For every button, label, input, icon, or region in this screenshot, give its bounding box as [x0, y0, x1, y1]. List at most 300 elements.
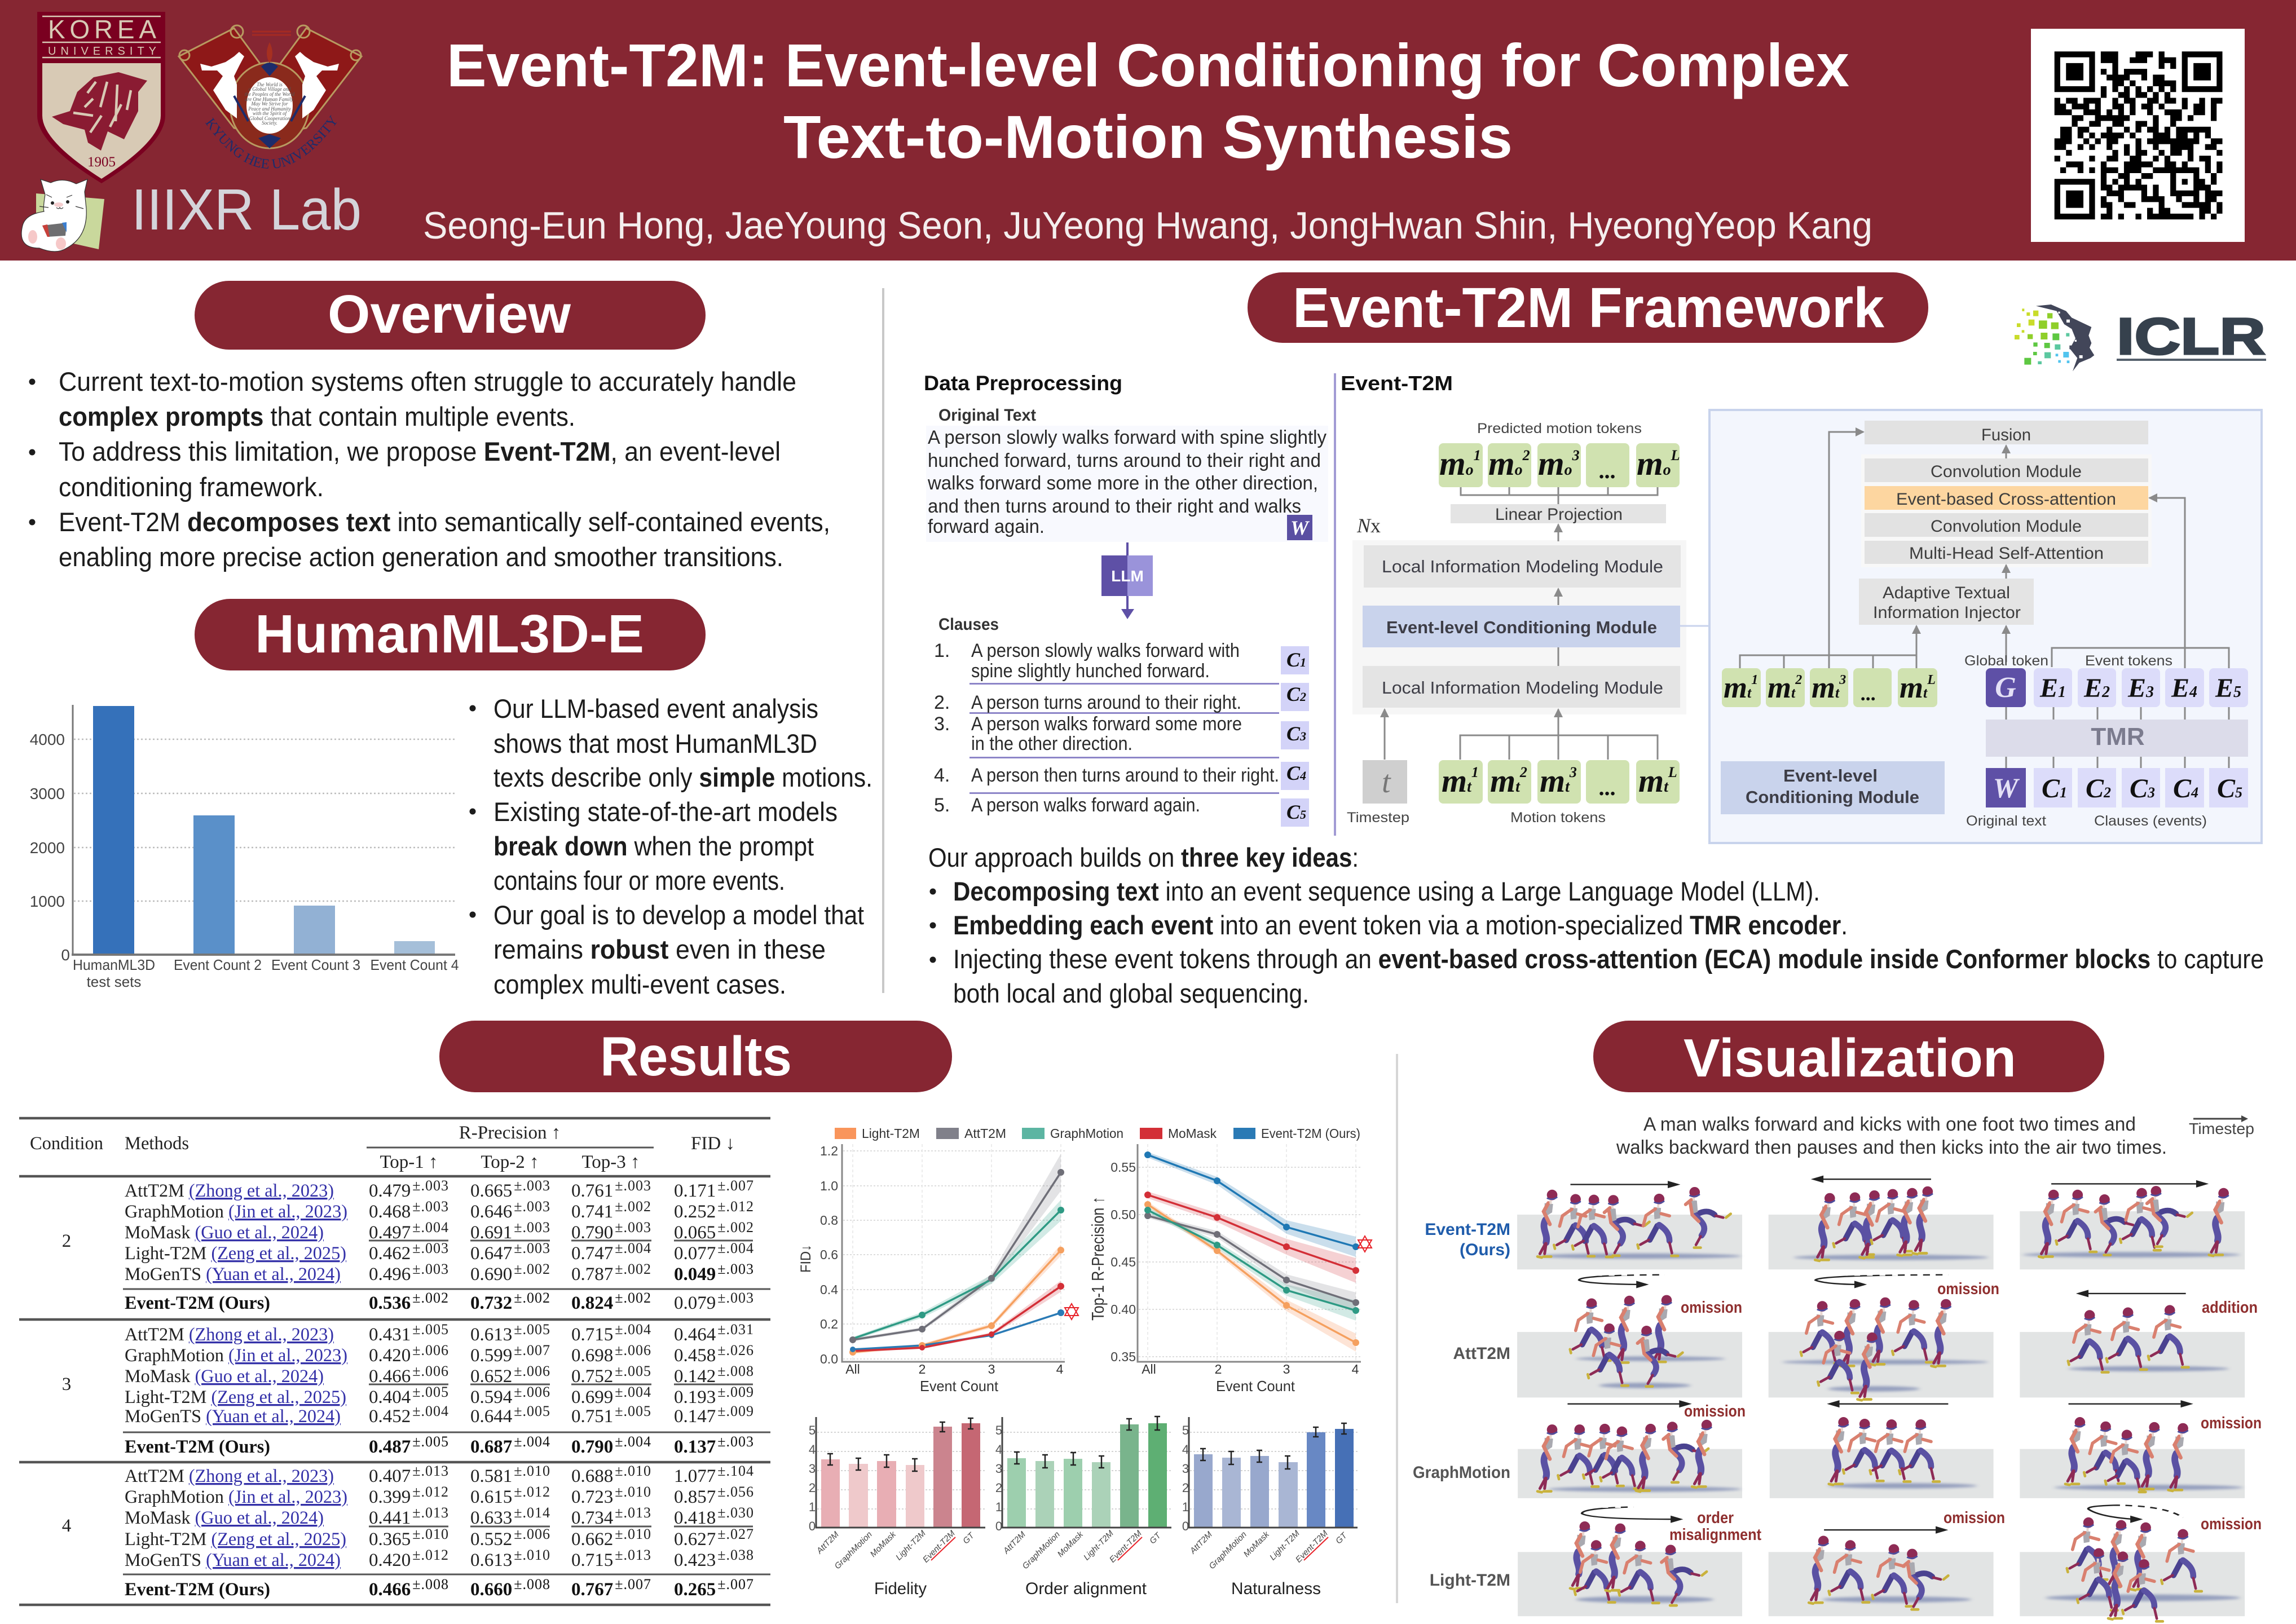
- predicted motion token row: 3: [1572, 447, 1580, 464]
- bar chart: event count distribution: [30, 705, 459, 990]
- table rows: condition 4: 0.581: [470, 1466, 512, 1486]
- table rows: condition 3: ±.005: [412, 1321, 449, 1338]
- table rows: condition 4: 1.077: [674, 1466, 716, 1486]
- row 3 figures: [1537, 1417, 2188, 1492]
- table rows: condition 4: ±.030: [717, 1504, 754, 1521]
- table rows: condition 2: 0.741: [571, 1202, 613, 1222]
- label: Original Text: Original Text: [938, 406, 1036, 425]
- table rows: condition 2: ±.004: [412, 1219, 449, 1235]
- table rows: condition 2: 0.065: [674, 1223, 716, 1243]
- logo: Kyung Hee University emblem: Peace and Humanity: [248, 106, 291, 112]
- line chart: FID by event count: All: [845, 1362, 860, 1376]
- table rows: condition 4: ±.007: [615, 1576, 651, 1592]
- text block: overview bullets: Event-T2M decomposes text into semantically self-contained events,: [59, 507, 830, 537]
- block: Event-level Conditioning Module legend: Conditioning Module: [1746, 787, 1919, 807]
- table rows: condition 3: 0.613: [470, 1325, 512, 1345]
- table rows: condition 2: 0.690: [470, 1264, 512, 1285]
- bar chart: Naturalness: GraphMotion: [1207, 1530, 1249, 1571]
- bar chart: Naturalness: Event-T2M: [1294, 1528, 1330, 1565]
- table rows: condition 2: MoMask (Guo et al., 2024): [125, 1223, 324, 1243]
- block: Adaptive Textual Information Injector: Adaptive Textual: [1883, 584, 2010, 602]
- line chart: Top-1 R-Precision by event count: 4: [1352, 1362, 1359, 1376]
- input: motion tokens: mt: [1638, 762, 1668, 799]
- bar chart: event count distribution: Event Count 4: [370, 956, 459, 973]
- table rows: condition 2: AttT2M (Zhong et al., 2023): [125, 1181, 334, 1201]
- panel: Data Preprocessing: [924, 372, 1328, 827]
- table rows: condition 4: 0.407: [369, 1466, 411, 1486]
- error annotations: omission: [1937, 1280, 1999, 1298]
- table rows: condition 2: 0.479: [369, 1181, 411, 1201]
- bar chart: Fidelity: Event-T2M: [921, 1528, 957, 1565]
- table rows: condition 3: 0.420: [369, 1345, 411, 1366]
- table rows: condition 3: 0.790: [571, 1437, 613, 1457]
- bar chart: event count distribution: 0: [61, 946, 70, 964]
- title: Event-T2M: Event-level Conditioning for Complex: [447, 31, 1849, 99]
- bar chart: Order alignment: 1: [995, 1500, 1002, 1514]
- table header: FID ↓: [691, 1133, 735, 1154]
- line chart: FID by event count: 0.6: [820, 1247, 838, 1262]
- line chart: FID by event count: FID↓: [798, 1245, 814, 1273]
- input: motion tokens: 1: [1471, 764, 1479, 780]
- row labels: (Ours): [1460, 1241, 1510, 1259]
- predicted motion token row: mo: [1439, 445, 1474, 482]
- text block: HumanML3D-E bullets: Existing state-of-the-art models: [493, 797, 838, 827]
- bar chart: event count distribution: 1000: [30, 893, 65, 910]
- table rows: condition 3: ±.005: [514, 1321, 550, 1338]
- table rows: condition 3: GraphMotion (Jin et al., 2023): [125, 1345, 347, 1366]
- bar chart: Fidelity: Fidelity: [874, 1579, 927, 1598]
- table rows: condition 2: ±.002: [615, 1290, 651, 1306]
- input: motion tokens: mt: [1442, 762, 1471, 799]
- table rows: condition 2: ±.003: [615, 1177, 651, 1194]
- block: TMR: TMR: [2091, 723, 2145, 751]
- table rows: condition 3: ±.004: [412, 1403, 449, 1419]
- predicted motion token row: L: [1671, 447, 1680, 464]
- list: clauses: C4: [1286, 762, 1306, 784]
- table rows: condition 2: ±.004: [717, 1240, 754, 1256]
- table rows: condition 2: 0.665: [470, 1181, 512, 1201]
- table rows: condition 2: MoGenTS (Yuan et al., 2024): [125, 1264, 341, 1285]
- table rows: condition 4: ±.014: [514, 1504, 550, 1521]
- table rows: condition 2: ±.012: [717, 1198, 754, 1215]
- bar chart: event count distribution: Event Count 3: [271, 956, 360, 973]
- table rows: condition 4: ±.007: [717, 1576, 754, 1592]
- predicted motion token row: ...: [1599, 458, 1616, 483]
- logo: Korea University crest: UNIVERSITY: [48, 45, 156, 58]
- predicted motion token row: 1: [1474, 447, 1481, 464]
- table rows: condition 2: ±.003: [717, 1261, 754, 1277]
- table rows: condition 2: 0.077: [674, 1243, 716, 1264]
- list: clauses: 1.: [934, 640, 950, 661]
- text block: HumanML3D-E bullets: Our goal is to develop a model that: [493, 900, 864, 930]
- line chart: FID by event count: 0.2: [820, 1317, 838, 1331]
- table rows: condition 4: MoGenTS (Yuan et al., 2024): [125, 1550, 341, 1570]
- logo: Kyung Hee University emblem: Global Cooperation: [249, 116, 290, 121]
- logo: Kyung Hee University emblem: [177, 25, 363, 169]
- clause token row: C5: [2217, 774, 2242, 804]
- timestep arrow: Timestep: [2189, 1120, 2254, 1137]
- logo text: IIIXR Lab: IIIXR Lab: [131, 177, 362, 242]
- text motion token row: mt: [1768, 670, 1795, 704]
- heading: Event-T2M: Event-T2M: [1341, 372, 1453, 395]
- line chart: Top-1 R-Precision by event count: 0.35: [1110, 1349, 1136, 1364]
- block: Fusion: Fusion: [1981, 426, 2031, 444]
- labels: original text and clauses: [1966, 813, 2207, 829]
- table rows: condition 2: Light-T2M (Zeng et al., 2025): [125, 1243, 346, 1264]
- table rows: condition 4: ±.010: [615, 1526, 651, 1542]
- bar chart: Fidelity: 1: [809, 1500, 816, 1514]
- table rows: condition 2: 0.536: [369, 1293, 411, 1313]
- table rows: condition 3: 0.458: [674, 1345, 716, 1366]
- logo: Kyung Hee University emblem: Society.: [262, 120, 277, 126]
- clause token row: W: [1993, 772, 2020, 804]
- global and event token row: E2: [2083, 673, 2110, 703]
- row labels: Light-T2M: [1430, 1571, 1510, 1590]
- table rows: condition 2: ±.002: [514, 1290, 550, 1306]
- bar chart: Fidelity: GT: [961, 1530, 977, 1546]
- table rows: condition 4: 0.723: [571, 1487, 613, 1507]
- table rows: condition 4: ±.013: [615, 1504, 651, 1521]
- label: predicted motion tokens: Predicted motion tokens: [1477, 421, 1642, 436]
- text block: overview bullets: conditioning framework.: [59, 472, 324, 502]
- bar chart: Naturalness: 3: [1182, 1462, 1189, 1476]
- table rows: condition 4: ±.012: [412, 1547, 449, 1563]
- block: Event-based Cross-attention: [1865, 486, 2148, 510]
- predicted motion token row: mo: [1488, 445, 1523, 482]
- input: motion tokens: mt: [1490, 762, 1520, 799]
- list: clauses: A person walks forward again.: [971, 795, 1200, 816]
- table rows: condition 4: AttT2M (Zhong et al., 2023): [125, 1466, 334, 1486]
- block: Event-level Conditioning Module legend: Event-level: [1783, 766, 1878, 785]
- table rows: condition 2: ±.003: [412, 1240, 449, 1256]
- table rows: condition 2: Event-T2M (Ours): [125, 1293, 270, 1313]
- row labels: AttT2M: [1453, 1344, 1510, 1363]
- logo: ICLR: [2015, 304, 2266, 371]
- block: Adaptive Textual Information Injector: Information Injector: [1873, 603, 2021, 622]
- bar chart: Fidelity: GraphMotion: [832, 1530, 874, 1571]
- bar chart: Fidelity: 3: [809, 1462, 816, 1476]
- table rows: condition 2: ±.007: [717, 1177, 754, 1194]
- row 4 figures: [1570, 1517, 2202, 1621]
- input: motion tokens: mt: [1540, 762, 1570, 799]
- text block: HumanML3D-E bullets: shows that most HumanML3D: [493, 729, 817, 758]
- logo: Kyung Hee University emblem: a Global Village and: [248, 86, 291, 92]
- table rows: condition 3: ±.009: [717, 1384, 754, 1400]
- text box: original text: W: [1290, 517, 1310, 539]
- bar chart: Naturalness: 1: [1182, 1500, 1189, 1514]
- text block: HumanML3D-E bullets: texts describe only simple motions.: [493, 762, 872, 792]
- list: clauses: 4.: [934, 765, 950, 786]
- bar chart: Naturalness: GT: [1334, 1530, 1350, 1546]
- block: Multi-Head Self-Attention: [1865, 541, 2148, 564]
- block: linear projection: [1451, 504, 1666, 524]
- bar chart: event count distribution: test sets: [87, 973, 141, 990]
- table rows: condition 2: 0.252: [674, 1202, 716, 1222]
- heading: HumanML3D-E: HumanML3D-E: [255, 604, 644, 664]
- block: Multi-Head Self-Attention: Multi-Head Self-Attention: [1909, 544, 2104, 563]
- line chart: Top-1 R-Precision by event count: Top-1 R-Precision ↑: [1088, 1197, 1108, 1321]
- prompt caption: A man walks forward and kicks with one foot two times and: [1643, 1114, 2136, 1135]
- text block: overview bullets: Current text-to-motion systems often struggle to accurately handle: [59, 367, 796, 396]
- table rows: condition 4: 0.423: [674, 1550, 716, 1570]
- line chart: Top-1 R-Precision by event count: [1088, 1144, 1372, 1394]
- heading: Visualization: Visualization: [1684, 1028, 2016, 1088]
- table rows: condition 4: 0.265: [674, 1579, 716, 1600]
- line chart: Top-1 R-Precision by event count: All: [1142, 1362, 1156, 1376]
- bar chart: Naturalness: Light-T2M: [1268, 1528, 1302, 1563]
- logo: Kyung Hee University emblem: The World is: [257, 82, 283, 87]
- table rows: condition 4: ±.013: [615, 1547, 651, 1563]
- table rows: condition 3: Light-T2M (Zeng et al., 2025): [125, 1387, 346, 1407]
- table rows: condition 4: ±.056: [717, 1484, 754, 1500]
- input: timestep: [1347, 760, 1409, 826]
- table rows: condition 4: 0.552: [470, 1529, 512, 1550]
- table rows: condition 3: 0.404: [369, 1387, 411, 1407]
- arrows: stack flow: [1385, 524, 1658, 760]
- list: clauses: C2: [1286, 683, 1306, 705]
- bar chart: Order alignment: [995, 1416, 1171, 1598]
- table rows: condition 2: 0.171: [674, 1181, 716, 1201]
- table rows: condition 4: 0.662: [571, 1529, 613, 1550]
- line chart: FID by event count: 1.2: [820, 1144, 838, 1158]
- error annotations: omission: [1684, 1402, 1746, 1420]
- table rows: condition 4: 0.613: [470, 1550, 512, 1570]
- text box: original text: hunched forward, turns around to their right and: [928, 450, 1321, 471]
- error annotations: omission: [1944, 1509, 2005, 1527]
- bar chart: Order alignment: Light-T2M: [1082, 1528, 1116, 1563]
- logo: Korea University crest: KOREA: [48, 15, 156, 44]
- table rows: condition 2: 0.079: [674, 1293, 716, 1313]
- list: clauses: C3: [1286, 722, 1306, 745]
- line chart: Top-1 R-Precision by event count: 0.50: [1110, 1207, 1136, 1222]
- label: N x: Nx: [1356, 514, 1381, 537]
- text box: original text: walks forward some more in the other direction,: [927, 473, 1318, 494]
- line chart: Top-1 R-Precision by event count: Event Count: [1216, 1378, 1295, 1394]
- prompt caption: walks backward then pauses and then kicks into the air two times.: [1616, 1137, 2167, 1158]
- row 1 figures: [1537, 1186, 2229, 1261]
- table rows: condition 2: 0.497: [369, 1223, 411, 1243]
- error annotations: omission: [1681, 1299, 1742, 1317]
- authors: Seong-Eun Hong, JaeYoung Seon, JuYeong Hwang, JongHwan Shin, HyeongYeop Kang: [423, 204, 1872, 247]
- table rows: condition 3: 0.687: [470, 1437, 512, 1457]
- table rows: condition 3: ±.004: [615, 1384, 651, 1400]
- bar chart: Fidelity: Light-T2M: [894, 1528, 928, 1563]
- table rows: condition 4: ±.010: [615, 1484, 651, 1500]
- bar chart: Naturalness: MoMask: [1242, 1529, 1272, 1559]
- table header: [30, 1123, 735, 1172]
- table rows: condition 4: ±.013: [412, 1463, 449, 1479]
- table rows: condition 3: 3: [62, 1374, 71, 1394]
- table rows: condition 3: 0.699: [571, 1387, 613, 1407]
- line chart: Top-1 R-Precision by event count: 2: [1215, 1362, 1222, 1376]
- row 2 figures: [1570, 1295, 2188, 1400]
- text motion token row: mt: [1900, 670, 1927, 704]
- floors: [1517, 1211, 2245, 1616]
- block: Adaptive Textual Information Injector: [1859, 579, 2034, 625]
- bar chart: Order alignment: 5: [995, 1423, 1002, 1437]
- clause token row: C3: [2130, 774, 2155, 804]
- table header: Top-3 ↑: [581, 1152, 640, 1172]
- text block: overview bullets: complex prompts that contain multiple events.: [59, 401, 575, 431]
- table rows: condition 3: 0.751: [571, 1406, 613, 1427]
- table rows: condition 2: ±.004: [615, 1240, 651, 1256]
- line chart: FID by event count: 1.0: [820, 1179, 838, 1193]
- connector: to detail panel: [1680, 625, 1709, 627]
- table rows: condition 2: ±.003: [412, 1198, 449, 1215]
- table rows: condition 3: ±.006: [412, 1363, 449, 1379]
- QR code: [2031, 29, 2245, 242]
- bar chart: Fidelity: MoMask: [869, 1529, 898, 1559]
- table rows: condition 3: 0.466: [369, 1366, 411, 1387]
- row labels: [1413, 1220, 1510, 1590]
- bar chart: Order alignment: MoMask: [1056, 1529, 1086, 1559]
- text block: HumanML3D-E bullets: Our LLM-based event analysis: [493, 694, 818, 723]
- table rows: condition 3: 0.487: [369, 1437, 411, 1457]
- table rows: condition 2: ±.003: [514, 1198, 550, 1215]
- list: clauses: A person slowly walks forward with: [971, 640, 1240, 661]
- table rows: condition 2: ±.002: [717, 1219, 754, 1235]
- block: TMR: [1986, 720, 2248, 757]
- global and event token row: G: [1995, 672, 2016, 704]
- bar chart: Order alignment: 4: [995, 1442, 1002, 1457]
- heading: Overview: [195, 281, 706, 350]
- panel: Results: [19, 1021, 1372, 1605]
- block: Convolution Module top: Convolution Module: [1931, 462, 2082, 481]
- table rows: condition 2: GraphMotion (Jin et al., 2023): [125, 1202, 347, 1222]
- labels: global and event tokens: [1964, 653, 2172, 669]
- table rows: condition 4: Light-T2M (Zeng et al., 2025): [125, 1529, 346, 1550]
- labels: global and event tokens: Event tokens: [2085, 653, 2172, 669]
- legend: line charts: Event-T2M (Ours): [1261, 1126, 1360, 1141]
- panel: Event-T2M Framework: [924, 272, 2266, 1008]
- bar chart: Fidelity: 5: [809, 1423, 816, 1437]
- arrow: LLM step: [1101, 542, 1153, 619]
- table header: Condition: [30, 1133, 103, 1154]
- global and event token row: [1986, 668, 2248, 707]
- line chart: FID by event count: [798, 1144, 1078, 1394]
- table rows: condition 3: 0.431: [369, 1325, 411, 1345]
- table rows: condition 4: 0.660: [470, 1579, 512, 1600]
- heading: Framework: Event-T2M Framework: [1293, 276, 1884, 339]
- table rows: condition 4: 4: [62, 1516, 71, 1536]
- list: clauses: A person turns around to their right.: [971, 692, 1241, 713]
- predicted motion token row: mo: [1538, 445, 1572, 482]
- table rows: condition 3: ±.004: [615, 1433, 651, 1450]
- table rows: condition 2: [62, 1177, 754, 1313]
- legend: line charts: [835, 1126, 1360, 1141]
- list: clauses: in the other direction.: [971, 733, 1132, 754]
- table rows: condition 3: 0.137: [674, 1437, 716, 1457]
- block: Fusion: [1865, 421, 2148, 444]
- panel: Visualization: [1413, 1021, 2262, 1621]
- bar chart: Naturalness: Naturalness: [1231, 1579, 1321, 1598]
- text block: overview bullets: [29, 367, 830, 572]
- table header: Top-2 ↑: [481, 1152, 539, 1172]
- list: clauses: 5.: [934, 795, 950, 816]
- logo: ICLR: ICLR: [2117, 308, 2266, 365]
- panel: Event-T2M architecture: [1341, 372, 2262, 843]
- table rows: condition 3: Event-T2M (Ours): [125, 1437, 270, 1457]
- predicted motion token row: mo: [1637, 445, 1671, 482]
- text block: three key ideas: Injecting these event tokens through an event-based cross-attention (ECA) module inside Conformer blocks to capture: [953, 944, 2264, 974]
- block: Convolution Module bottom: [1865, 513, 2148, 537]
- bar chart: Order alignment: GraphMotion: [1020, 1530, 1062, 1571]
- table rows: condition 2: ±.003: [514, 1219, 550, 1235]
- table rows: condition 2: 0.462: [369, 1243, 411, 1264]
- table rows: condition 2: 0.646: [470, 1202, 512, 1222]
- error annotations: [1669, 1280, 2262, 1544]
- text block: three key ideas: both local and global sequencing.: [953, 978, 1309, 1008]
- labels: global and event tokens: Global token: [1964, 653, 2048, 669]
- text block: overview bullets: enabling more precise action generation and smoother transitions.: [59, 542, 783, 572]
- table rows: condition 4: ±.012: [514, 1484, 550, 1500]
- global and event token row: E3: [2127, 673, 2154, 703]
- panel: Event-level Conditioning Module detail: [1709, 410, 2262, 843]
- bar chart: event count distribution: 3000: [30, 785, 65, 802]
- table rows: condition 4: ±.008: [514, 1576, 550, 1592]
- header banner: [0, 0, 2296, 261]
- connector: tokens to linear projection: [1461, 487, 1658, 504]
- list: clauses: A person walks forward some more: [971, 713, 1242, 735]
- heading: Visualization: [1593, 1021, 2104, 1092]
- table rows: condition 4: 0.627: [674, 1529, 716, 1550]
- section divider bottom: [1396, 1054, 1398, 1603]
- text box: original text: [926, 426, 1328, 542]
- text motion token row: mt: [1812, 670, 1839, 704]
- input: motion tokens: 2: [1519, 764, 1527, 780]
- text motion token row: 1: [1751, 673, 1758, 687]
- table header: R-Precision ↑: [459, 1123, 561, 1143]
- line chart: Top-1 R-Precision by event count: 0.45: [1110, 1255, 1136, 1269]
- line chart: FID by event count: 0.4: [820, 1282, 838, 1297]
- block: Event-based Cross-attention: Event-based Cross-attention: [1896, 490, 2116, 509]
- input: timestep: Timestep: [1347, 810, 1409, 826]
- table rows: condition 2: ±.003: [412, 1261, 449, 1277]
- bar chart: event count distribution: 2000: [30, 839, 65, 857]
- section divider left: [882, 288, 884, 993]
- table rows: condition 4: ±.027: [717, 1526, 754, 1542]
- table rows: condition 3: ±.003: [717, 1433, 754, 1450]
- line chart: Top-1 R-Precision by event count: 0.55: [1110, 1160, 1136, 1175]
- table rows: condition 4: 0.420: [369, 1550, 411, 1570]
- table rows: condition 3: ±.031: [717, 1321, 754, 1338]
- line chart: FID by event count: Event Count: [920, 1378, 999, 1394]
- bar chart: Naturalness: [1182, 1417, 1358, 1598]
- table rows: condition 3: ±.006: [514, 1363, 550, 1379]
- table rows: condition 4: ±.010: [514, 1547, 550, 1563]
- table rows: condition 3: 0.599: [470, 1345, 512, 1366]
- table rows: condition 2: ±.002: [514, 1261, 550, 1277]
- table rows: condition 4: ±.012: [412, 1484, 449, 1500]
- table rows: condition 3: ±.004: [615, 1321, 651, 1338]
- logo: Korea University crest: [37, 12, 165, 183]
- row labels: Event-T2M: [1425, 1220, 1510, 1239]
- title: [447, 31, 1849, 171]
- bar chart: Order alignment: 3: [995, 1462, 1002, 1476]
- table rows: condition 4: 0.688: [571, 1466, 613, 1486]
- table rows: condition 3: ±.005: [615, 1363, 651, 1379]
- table rows: condition 4: 0.767: [571, 1579, 613, 1600]
- prompt caption: [1616, 1114, 2167, 1158]
- table rows: condition 2: ±.003: [717, 1290, 754, 1306]
- logo: Kyung Hee University emblem: with the Spirit of: [253, 111, 288, 116]
- text motion token row: L: [1927, 673, 1936, 687]
- line chart: FID by event count: 3: [988, 1362, 995, 1376]
- block: Event-level Conditioning Module legend: [1721, 761, 1945, 814]
- table rows: condition 4: MoMask (Guo et al., 2024): [125, 1508, 324, 1528]
- clause token row: [1986, 768, 2248, 807]
- bar chart: Fidelity: 4: [809, 1442, 816, 1457]
